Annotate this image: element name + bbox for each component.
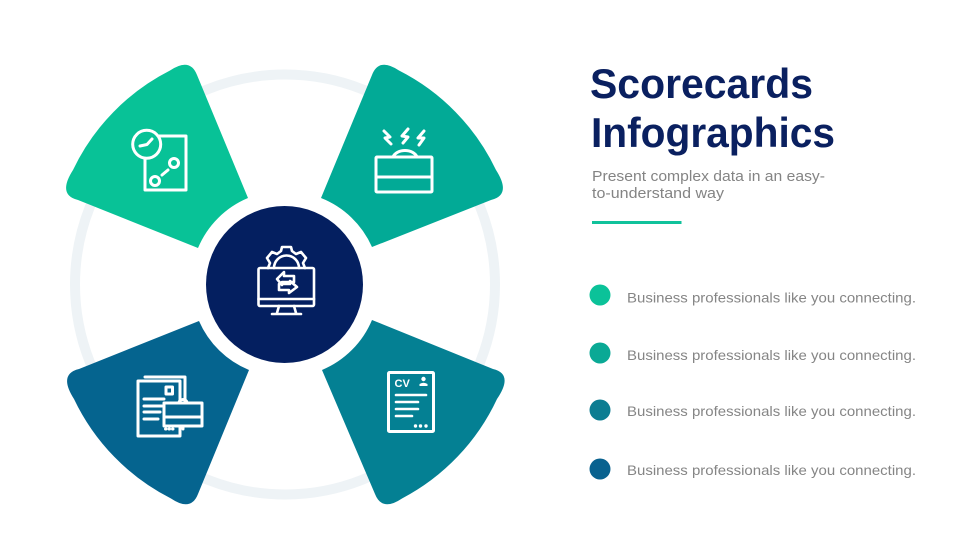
title: Infographics [591, 109, 835, 156]
legend item 3: Business professionals like you connecting. [627, 403, 916, 419]
icon: monitor with gear and arrows [258, 247, 314, 314]
panel: center hub [206, 206, 363, 363]
subtitle [592, 168, 825, 202]
accent divider [592, 221, 682, 224]
legend item 2 [590, 342, 916, 364]
background ring [75, 74, 495, 494]
title [590, 60, 835, 156]
legend item 4: Business professionals like you connecting. [627, 462, 916, 478]
legend item 2: Business professionals like you connecting. [627, 347, 916, 363]
icon: CV document [388, 372, 434, 432]
panel: top-left petal [66, 65, 248, 248]
legend item 4 [590, 458, 916, 480]
title: Scorecards [590, 60, 813, 107]
icon: clock and chart document [133, 130, 186, 190]
legend item 1: Business professionals like you connecting. [627, 290, 916, 306]
icon: CV document: CV [394, 378, 410, 390]
subtitle: to-understand way [592, 185, 725, 202]
icon: briefcase with lightning bolts [376, 129, 432, 192]
legend item 3 [590, 400, 916, 420]
panel: bottom-left petal [67, 321, 249, 504]
icon: documents with briefcase [138, 377, 202, 436]
panel: top-right petal [321, 65, 503, 247]
panel: bottom-right petal [322, 320, 505, 504]
subtitle: Present complex data in an easy- [592, 168, 825, 185]
legend item 1 [590, 284, 916, 306]
